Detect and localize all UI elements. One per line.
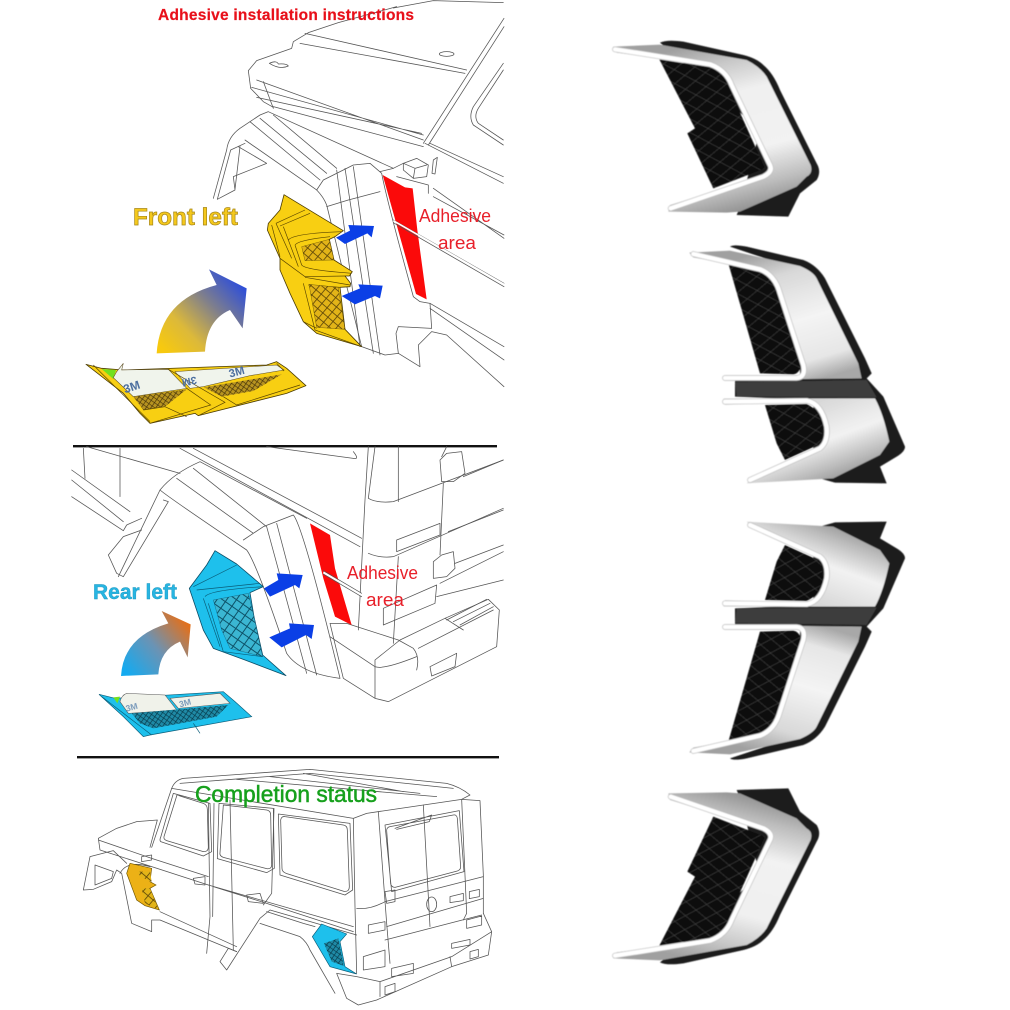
adhesive area: red strip bbox=[383, 175, 427, 299]
arrow: upper blue bbox=[336, 225, 374, 244]
part: gold fender vent bbox=[267, 195, 362, 347]
part: blue vent installed bbox=[312, 924, 357, 974]
divider: bottom bbox=[77, 756, 499, 758]
arrow: lower blue bbox=[269, 623, 314, 647]
part: flat gold vent with 3M tape: 3M bbox=[181, 373, 198, 388]
arrow: lower blue bbox=[342, 284, 383, 304]
line drawing: full car bbox=[83, 769, 492, 1005]
part: flat gold vent with 3M tape bbox=[86, 362, 306, 423]
label: adhesive area (rear) bbox=[347, 563, 418, 610]
part: flat gold vent with 3M tape: 3M bbox=[122, 378, 142, 396]
photo: front vent, top view bbox=[613, 41, 819, 217]
arrow: blue-to-orange curved bbox=[121, 611, 191, 676]
line drawing: rear of car bbox=[72, 447, 503, 737]
panel: front left installation bbox=[86, 1, 504, 423]
part: gold vent installed bbox=[127, 863, 159, 910]
label: adhesive area (front) bbox=[419, 206, 491, 253]
part: flat blue vent with 3M tape: 3M bbox=[125, 701, 139, 714]
part: flat blue vent with 3M tape bbox=[99, 692, 252, 737]
photo: double-lobe vent, mirrored bbox=[689, 522, 905, 760]
panel: rear left installation bbox=[72, 447, 503, 737]
arrow: upper blue bbox=[264, 573, 303, 597]
label: front left: Front left bbox=[133, 204, 238, 231]
label: rear left: Rear left bbox=[93, 581, 177, 604]
arrow: gold-to-blue curved bbox=[157, 269, 247, 353]
adhesive area: red strip bbox=[310, 523, 352, 625]
photo: front vent, mirrored bbox=[613, 788, 819, 964]
label: adhesive area (rear): area bbox=[366, 590, 405, 610]
heading: completion status: Completion status bbox=[195, 781, 377, 807]
line drawing: front of car bbox=[86, 1, 504, 423]
label: adhesive area (front): Adhesive bbox=[419, 206, 491, 226]
panel: completion status bbox=[83, 769, 492, 1005]
label: adhesive area (rear): Adhesive bbox=[347, 563, 418, 583]
divider: top bbox=[73, 445, 497, 447]
heading: adhesive installation instructions: Adhesive installation instructions bbox=[158, 7, 414, 24]
label: adhesive area (front): area bbox=[438, 233, 477, 253]
photo: double-lobe vent bbox=[689, 245, 905, 483]
part: flat gold vent with 3M tape: 3M bbox=[228, 365, 246, 381]
part: blue fender vent bbox=[189, 551, 286, 676]
part: flat blue vent with 3M tape: 3M bbox=[178, 696, 192, 709]
